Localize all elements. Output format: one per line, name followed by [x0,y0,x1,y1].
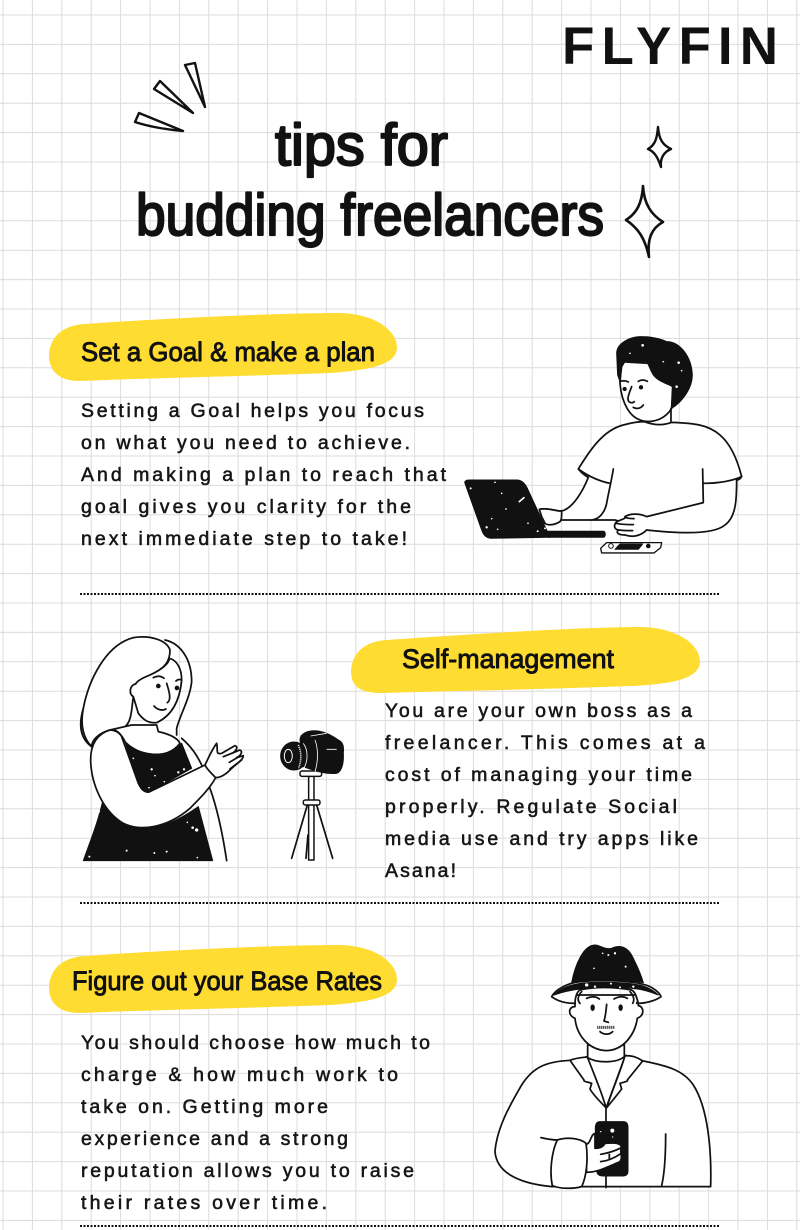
text block: self-management: freelancer. This comes at a [385,732,705,754]
title [136,113,604,248]
hand [615,514,647,536]
dress top [125,742,192,792]
heading highlight: set a goal [49,313,397,381]
icon: burst of three spikes [135,63,205,131]
back hair [165,640,192,735]
text block: self-management [385,700,705,882]
text block: base rates: experience and a strong [81,1128,348,1150]
hat crown [572,945,643,983]
speckles [88,757,198,858]
heading: self-management: Self-management [402,644,614,674]
body top [110,725,180,755]
face [130,658,182,723]
neck and face [620,362,673,421]
text block: set a goal: And making a plan to reach that [81,464,447,486]
hand [205,743,243,778]
text block: base rates: charge & how much work to [81,1064,398,1086]
panel: base rates [49,945,711,1214]
facial features [620,380,647,408]
divider [80,1225,720,1227]
text block: set a goal: Setting a Goal helps you focus [81,400,424,422]
phone [595,1122,628,1176]
text block: base rates [81,1032,430,1214]
title: tips for [275,113,448,178]
shirt and arms [540,422,742,533]
hat brim [552,981,661,1003]
divider [80,593,720,595]
panel: set a goal [49,313,742,553]
icon: large sparkle [626,186,663,257]
hand on laptop [539,509,562,525]
heading: set a goal: Set a Goal & make a plan [81,337,375,367]
text block: set a goal [81,400,447,550]
text block: base rates: their rates over time. [81,1192,327,1214]
text block: self-management: media use and try apps like [385,828,698,850]
text block: base rates: You should choose how much to [81,1032,430,1054]
icon: small sparkle [648,127,671,167]
logo: FLYFIN: FLYFIN [562,17,778,76]
panel: self-management [81,627,705,882]
text block: base rates: reputation allows you to raise [81,1160,414,1182]
neck and head [588,1045,624,1062]
text block: self-management: Asana! [385,860,456,882]
phone on table [601,543,662,553]
text block: self-management: cost of managing your time [385,764,692,786]
text block: self-management: You are your own boss as a [385,700,692,722]
back coat line [182,738,227,861]
title: budding freelancers [136,183,604,248]
hair [617,337,692,408]
illustration: woman and camera [81,637,344,861]
sleeve cuff [551,1138,587,1188]
text block: set a goal: on what you need to achieve. [81,432,410,454]
illustration: man at laptop [465,337,742,553]
laptop [465,480,605,538]
hand [585,1133,621,1172]
text block: set a goal: next immediate step to take! [81,528,407,550]
jacket [495,1056,711,1187]
illustration: man with hat and phone [495,945,711,1188]
facial features [587,997,627,1034]
arm [91,730,216,828]
heading: base rates: Figure out your Base Rates [72,966,382,996]
collar [570,1057,606,1108]
heading highlight: base rates [49,945,397,1013]
divider [80,902,720,904]
text block: self-management: properly. Regulate Social [385,796,677,818]
dress lower [83,798,213,861]
text block: base rates: take on. Getting more [81,1096,328,1118]
heading highlight: self-management [351,627,700,693]
icon: camera on tripod [281,731,344,860]
speckles [585,952,634,988]
text block: set a goal: goal gives you clarity for the [81,496,411,518]
